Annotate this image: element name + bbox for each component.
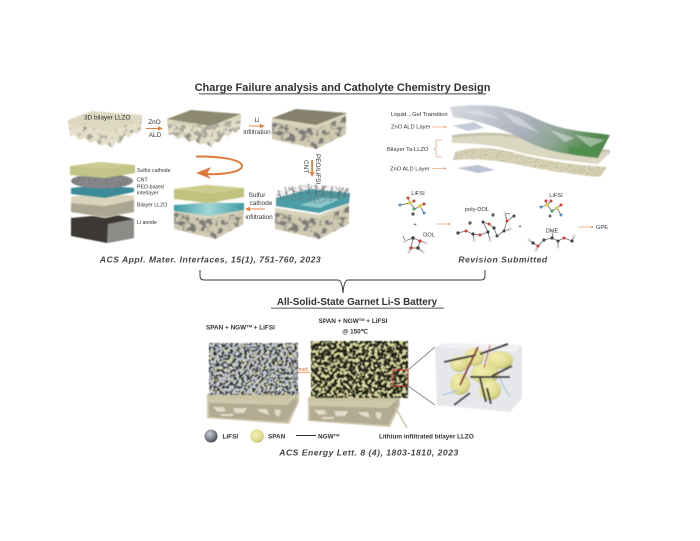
labels: stack layers: PEO-based — [137, 184, 164, 190]
label: temperature: @ 150℃ — [342, 328, 368, 336]
label: ZnO: ZnO — [148, 119, 161, 126]
molecule: LiFSI second — [540, 200, 562, 218]
legend: LiFSI sphere — [204, 430, 218, 442]
cube: before melt — [207, 343, 299, 424]
layer: PEO interlayer — [71, 185, 134, 198]
label: Li: Li — [255, 117, 259, 124]
pointer: lithium label — [395, 407, 407, 428]
labels: stack layers: Bilayer LLZO — [137, 202, 167, 208]
label: right cube composition: SPAN + NGW — [319, 318, 359, 325]
label: left cube composition: + LiFSI — [252, 324, 275, 332]
label: Sulfur: Sulfur — [249, 192, 266, 199]
block: sulfur cathode on interlayer — [174, 185, 244, 240]
citation: ACS Energy Lett.: ACS Energy Lett. 8 (4), 1803-1810, 2023 — [278, 448, 459, 458]
zoom lines — [408, 347, 435, 405]
arrow: sulfur cathode infiltration — [245, 207, 265, 211]
arrow: melt: melt — [298, 367, 309, 373]
molecule: DOL — [403, 236, 427, 253]
label: LiFSI: LiFSI — [411, 191, 425, 197]
label: left cube composition: SPAN + NGW — [206, 324, 246, 332]
highlight: red selection square — [393, 370, 408, 386]
citation: ACS Appl. Mater. Interfaces: ACS Appl. Mater. Interfaces, 15(1), 751-760, 2023 — [99, 254, 321, 264]
label: GPE: GPE — [596, 225, 608, 231]
legend: LiFSI: LiFSI — [222, 434, 238, 440]
heading: all-solid-state battery: All-Solid-State Garnet Li-S Battery — [277, 297, 438, 308]
arrows: layer pointers — [432, 126, 446, 170]
layer: Li anode — [71, 214, 134, 243]
labels: stack layers: interlayer — [137, 190, 159, 196]
label: right cube composition: + LiFSI — [365, 318, 388, 325]
label: CNT: CNT — [302, 160, 309, 173]
plus: + — [413, 222, 417, 228]
panel: charge failure process — [68, 109, 350, 264]
block: 3D bilayer LLZO — [68, 111, 143, 150]
label: 3D bilayer LLZO: 3D bilayer LLZO — [84, 114, 131, 122]
labels: layer names: ZnO ALD Layer — [390, 166, 430, 172]
block: ZnO coated LLZO — [167, 110, 242, 149]
labels: layer names — [387, 112, 448, 172]
block: Li infiltrated LLZO — [272, 109, 347, 150]
labels: layer names: Liquid→Gel Transition — [391, 112, 448, 118]
arrow: PEO/LiFSI CNT — [310, 160, 315, 177]
label: poly-DOL: poly-DOL — [465, 207, 489, 213]
exploded stack — [70, 162, 135, 243]
label: right cube composition: TM — [359, 317, 365, 322]
label: infiltration: infiltration — [243, 129, 271, 136]
label: DME: DME — [546, 228, 559, 234]
layer: bilayer LLZO — [71, 193, 134, 218]
legend — [204, 429, 474, 443]
label: PEO/LiFSI: PEO/LiFSI — [314, 154, 321, 184]
arrow: ZnO ALD — [146, 126, 163, 131]
arrow: to GPE — [579, 226, 593, 228]
title: charge failure analysis: Charge Failure analysis and Catholyte Chemistry Design — [195, 82, 491, 94]
label: left cube composition: TM — [246, 324, 253, 328]
illustration: layered solid electrolyte — [450, 105, 610, 178]
inset: zoomed composite — [435, 343, 522, 412]
molecule: LiFSI — [398, 196, 426, 216]
labels: stack layers: Sulfur cathode — [137, 168, 171, 174]
layer: CNT — [70, 173, 134, 189]
legend: SPAN: SPAN — [268, 434, 286, 440]
labels: layer names: Bilayer Ta-LLZO — [387, 147, 429, 153]
legend: lithium infiltrated: Lithium infiltrated bilayer LLZO — [379, 434, 474, 440]
arrow: reaction — [436, 223, 450, 225]
label: infiltration: infiltration — [245, 214, 273, 221]
arrow: Li infiltration — [249, 124, 265, 128]
block: CNT and PEO coated LLZO — [275, 184, 350, 240]
labels: stack layers: CNT — [137, 178, 148, 184]
label: LiFSI second: LiFSI — [549, 193, 563, 199]
layer: sulfur cathode — [70, 162, 135, 178]
label: cathode: cathode — [250, 200, 273, 207]
labels: stack layers: Li anode — [137, 220, 157, 226]
legend: NGW line — [296, 434, 316, 436]
citation: revision submitted: Revision Submitted — [458, 254, 548, 264]
molecule: poly-DOL — [456, 212, 516, 241]
panel: catholyte design — [387, 105, 610, 264]
label: DOL: DOL — [423, 232, 435, 238]
labels: layer names: ZnO ALD Layer — [391, 124, 431, 130]
panel: battery illustrations — [206, 317, 522, 428]
legend: NGW: NGW — [318, 434, 334, 440]
plus: + — [518, 224, 522, 230]
legend: SPAN sphere — [250, 429, 264, 443]
brace — [200, 270, 485, 293]
labels: stack layers — [137, 168, 171, 226]
arrow: curved process arrow — [196, 156, 242, 179]
legend: NGW: TM — [334, 432, 340, 438]
label: ALD: ALD — [149, 132, 162, 139]
molecule: DME — [528, 232, 575, 251]
cube: after melt — [308, 341, 408, 427]
